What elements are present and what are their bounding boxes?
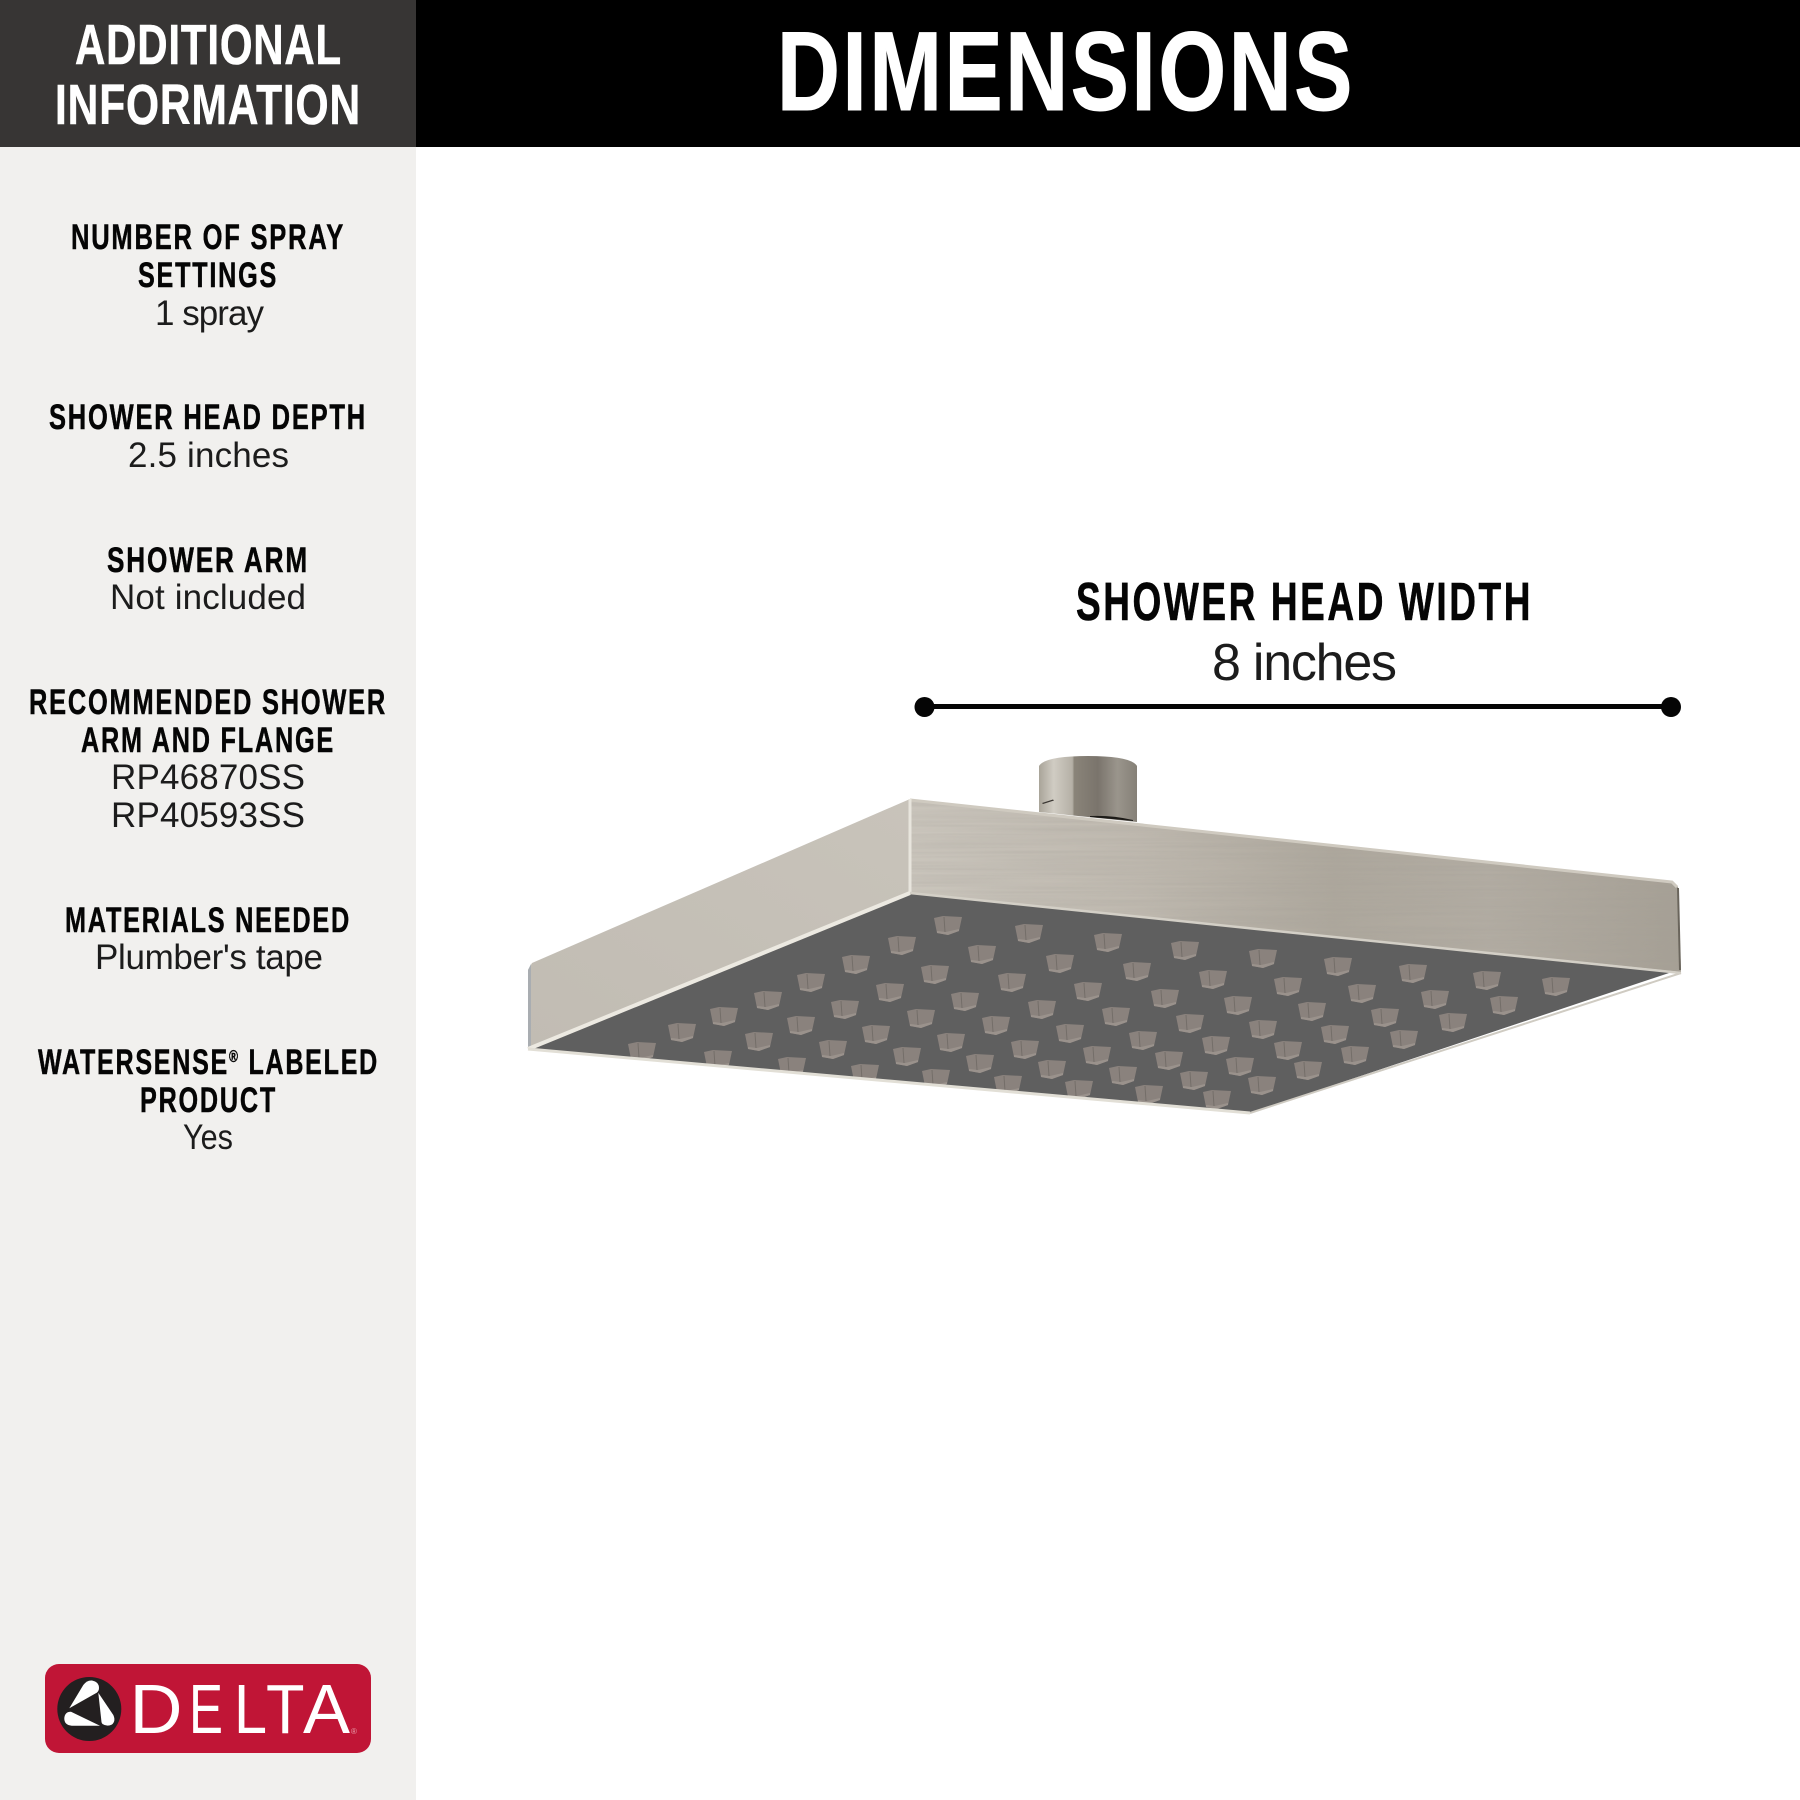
spec: number of spray settings: 1 spray: [155, 294, 264, 333]
front side face: [910, 799, 1681, 972]
spec: shower arm: SHOWER ARM: [107, 541, 309, 580]
spec: recommended shower arm and flange: [29, 683, 387, 835]
spec: number of spray settings: [71, 218, 345, 333]
spec: shower head depth: [49, 398, 367, 475]
spec: watersense labeled product: Yes: [183, 1118, 233, 1157]
spec: materials needed: Plumber's tape: [95, 938, 323, 977]
heading: additional information: [0, 0, 416, 147]
spec: watersense labeled product: LABELED: [240, 1043, 379, 1082]
spec: recommended shower arm and flange: RECOMMENDED SHOWER: [29, 683, 387, 722]
logo: delta: [45, 1664, 371, 1753]
spec: number of spray settings: NUMBER OF SPRAY: [71, 218, 345, 257]
logo: delta: E: [189, 1670, 223, 1748]
spec: watersense labeled product: [38, 1043, 379, 1157]
spec: materials needed: MATERIALS NEEDED: [65, 901, 351, 940]
callout: shower head width: 8 inches: [1212, 634, 1397, 692]
spec: materials needed: [65, 901, 351, 977]
header band: dimensions: [416, 0, 1800, 147]
spec: shower arm: Not included: [110, 578, 306, 617]
logo: delta: T: [266, 1670, 304, 1748]
heading: additional information: ADDITIONAL: [75, 13, 342, 77]
spray nozzles: [628, 916, 1570, 1109]
spec: number of spray settings: SETTINGS: [138, 256, 278, 295]
spec: recommended shower arm and flange: RP40593SS: [111, 796, 305, 835]
spec: recommended shower arm and flange: RP46870SS: [111, 758, 305, 797]
spec: shower head depth: SHOWER HEAD DEPTH: [49, 398, 367, 437]
underside spray face: [528, 893, 1672, 1113]
icon: delta emblem: [57, 1677, 121, 1741]
shower head product image: [528, 756, 1681, 1113]
callout: shower head width: [914, 572, 1681, 717]
logo: delta: A: [303, 1670, 350, 1748]
heading: additional information: INFORMATION: [55, 73, 361, 137]
logo: delta: D: [130, 1670, 182, 1748]
spec: shower head depth: 2.5 inches: [128, 436, 289, 475]
shower arm connector: [1039, 756, 1137, 822]
spec: watersense labeled product: PRODUCT: [140, 1081, 277, 1120]
spec: watersense labeled product: ®: [229, 1047, 240, 1066]
dimension line: [914, 697, 1681, 717]
panel: additional information sidebar: [0, 0, 416, 1800]
left side face: [528, 799, 910, 1048]
spec: watersense labeled product: WATERSENSE: [38, 1043, 305, 1082]
title: dimensions: DIMENSIONS: [777, 9, 1355, 134]
logo: delta: L: [234, 1670, 267, 1748]
spec: shower arm: [107, 541, 309, 617]
logo: delta: ®: [351, 1727, 357, 1736]
callout: shower head width: SHOWER HEAD WIDTH: [1076, 572, 1533, 632]
spec: recommended shower arm and flange: ARM AND FLANGE: [81, 721, 335, 760]
